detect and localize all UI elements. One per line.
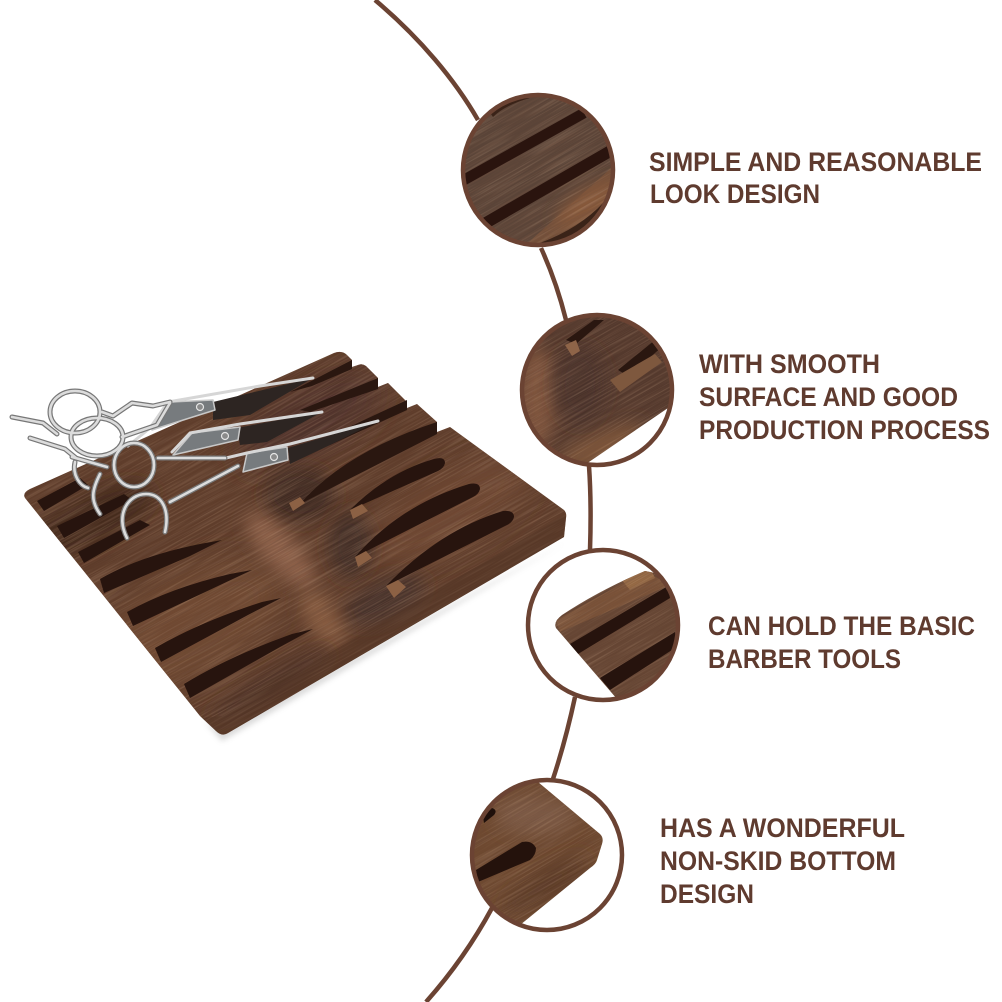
connector arc [375, 0, 591, 1002]
left open slots [37, 478, 313, 698]
pivots [196, 404, 278, 460]
blade edges [128, 378, 378, 458]
text: simple and reasonable look design: SIMPLE AND REASONABLE [649, 147, 982, 177]
upper ridge grooves [290, 360, 437, 504]
pivot plates [152, 400, 288, 472]
text: smooth surface and good production process: WITH SMOOTH [699, 349, 880, 379]
text: can hold the basic barber tools: CAN HOLD THE BASIC [708, 611, 975, 641]
silver handles [12, 391, 238, 538]
text: simple and reasonable look design: LOOK DESIGN [650, 179, 820, 209]
handle shadows [12, 391, 238, 538]
board shadow [205, 542, 566, 741]
callout circle 1: grooves detail [460, 92, 616, 248]
text: simple and reasonable look design [649, 147, 982, 209]
slot end highlights [289, 497, 406, 598]
text: wonderful non-skid bottom design: HAS A WONDERFUL [660, 813, 905, 843]
text: wonderful non-skid bottom design: DESIGN [660, 879, 754, 909]
front side face [200, 514, 566, 742]
scissors [12, 378, 378, 538]
text: can hold the basic barber tools [708, 611, 975, 674]
text: wonderful non-skid bottom design: NON-SKID BOTTOM [660, 846, 896, 876]
wooden board [24, 352, 566, 735]
right rounded slots [350, 458, 514, 586]
text: smooth surface and good production process [699, 349, 990, 445]
text: can hold the basic barber tools: BARBER TOOLS [708, 644, 901, 674]
text: smooth surface and good production process: SURFACE AND GOOD [699, 382, 958, 412]
dark blades [213, 378, 378, 464]
callout circle 4: non-skid corner detail [470, 778, 624, 932]
product: wooden tool holder with scissors [10, 352, 566, 742]
callout circle 2: smooth surface detail [520, 312, 674, 468]
callout circle 3: tool slots detail [526, 548, 680, 702]
text: wonderful non-skid bottom design [660, 813, 905, 909]
